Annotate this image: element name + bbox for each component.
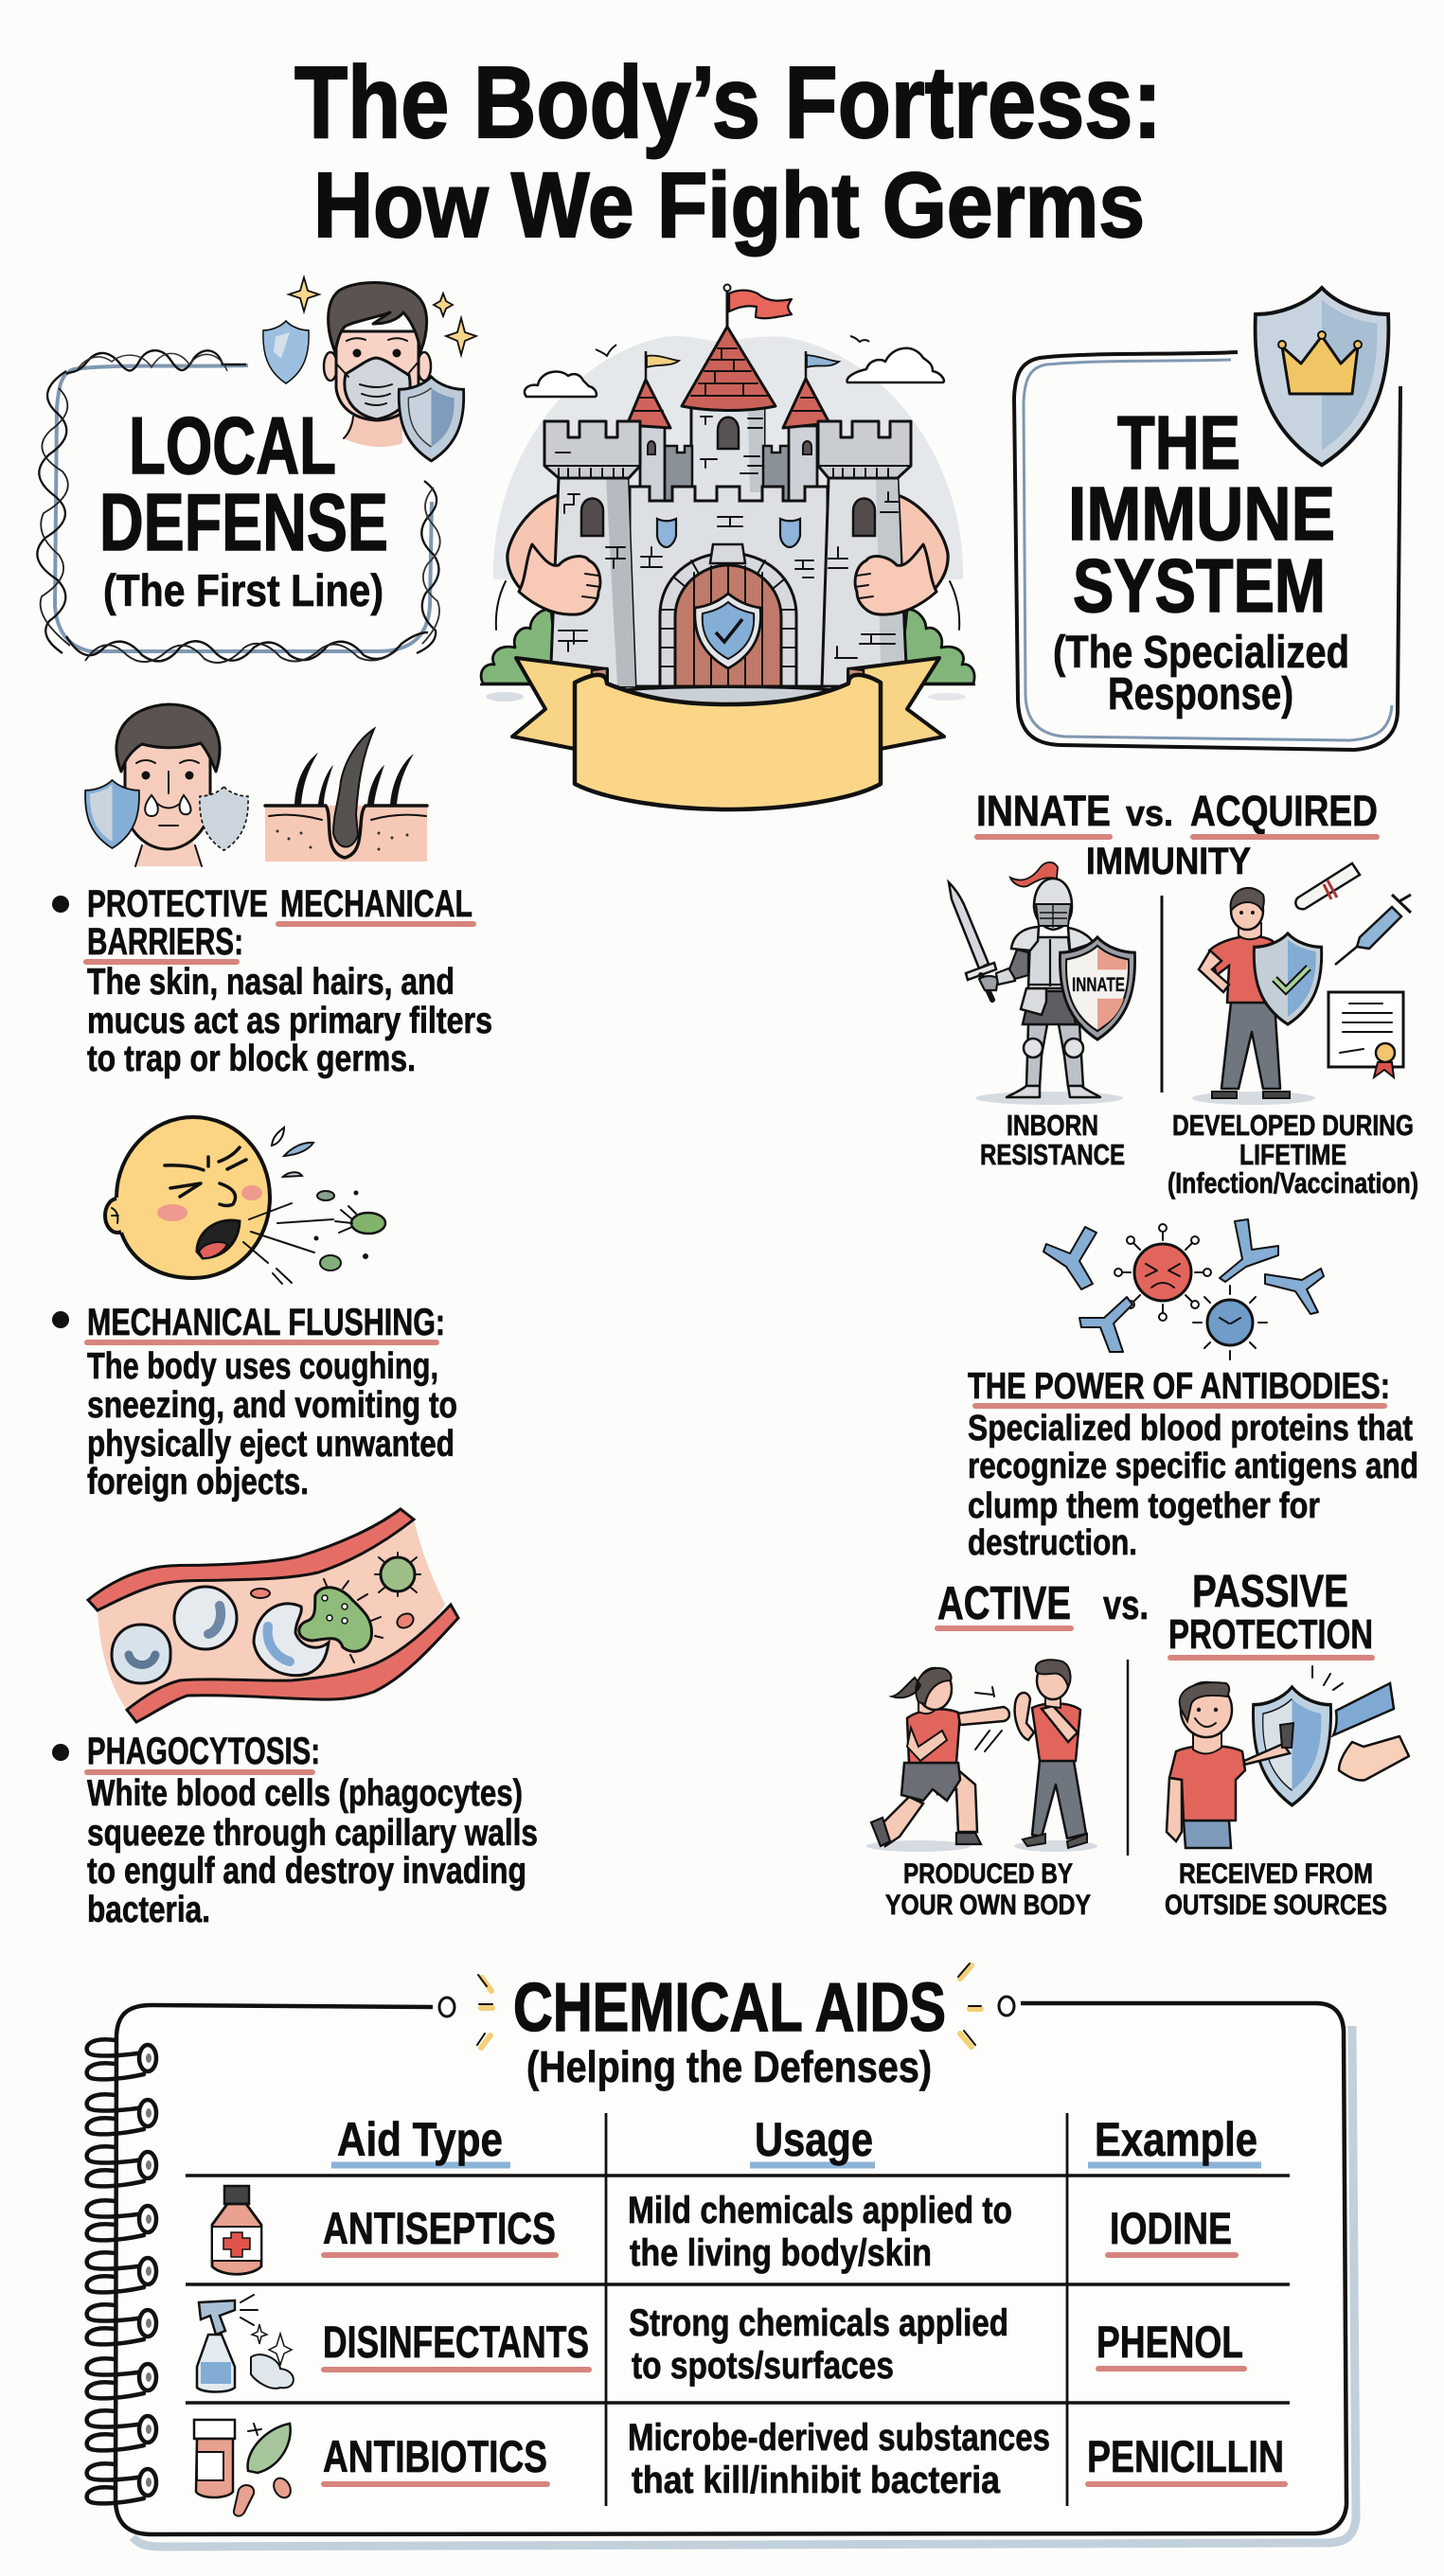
- produced by your own body label: [885, 1858, 1091, 1921]
- icon: sparkles: [289, 277, 476, 355]
- description text: [968, 1409, 1418, 1563]
- title: [294, 44, 1162, 257]
- mail skirt: [1023, 991, 1076, 1024]
- table grid: [186, 2113, 1290, 2506]
- panel: immune system heading: THE: [1117, 400, 1240, 485]
- heading: PASSIVE: [1192, 1567, 1348, 1617]
- heading: IMMUNITY: [1086, 841, 1251, 882]
- fists: [519, 544, 936, 614]
- panel: immune system heading: SYSTEM: [1073, 543, 1326, 628]
- heading: ACTIVE: [937, 1578, 1071, 1629]
- icon: boy with shield and helping hands: [1167, 1666, 1409, 1848]
- inborn resistance label: RESISTANCE: [980, 1138, 1125, 1171]
- bushes: [481, 610, 974, 684]
- scribbled border: [37, 350, 440, 663]
- panel: power of antibodies: [968, 1219, 1418, 1563]
- icon: armored knight: INNATE: [1072, 974, 1125, 996]
- inborn resistance label: INBORN: [1007, 1109, 1098, 1142]
- icon: striped gray shield: [399, 377, 464, 461]
- table row: antibiotics: PENICILLIN: [1087, 2431, 1284, 2481]
- heading text: MECHANICAL FLUSHING:: [87, 1302, 445, 1343]
- description text: White blood cells (phagocytes): [87, 1773, 523, 1814]
- legs: [1026, 1024, 1083, 1087]
- icon: crown shield: [1256, 288, 1388, 465]
- panel: local defense heading: LOCAL: [129, 401, 336, 491]
- description text: [87, 1773, 538, 1930]
- icon: small blue shield: [263, 321, 309, 383]
- panel: chemical aids notebook: [87, 1963, 1356, 2547]
- heading: vs.: [1126, 794, 1173, 834]
- heading: [477, 1963, 981, 2091]
- description text: foreign objects.: [87, 1462, 309, 1502]
- table row: antibiotics: Microbe-derived substances: [628, 2417, 1050, 2459]
- icon: woman boxing: [866, 1668, 1009, 1852]
- center tower with flag: [682, 284, 792, 502]
- description text: to trap or block germs.: [87, 1039, 416, 1079]
- icon: antiseptic bottle: [212, 2186, 261, 2274]
- table row: disinfectants: DISINFECTANTS: [323, 2317, 589, 2367]
- bullet: [52, 1311, 69, 1328]
- main wall: [630, 487, 828, 686]
- icon: man blocking: [1014, 1660, 1097, 1852]
- table row: antiseptics: Mild chemicals applied to: [628, 2190, 1012, 2231]
- spiral binding: [87, 2039, 156, 2503]
- description text: [87, 1346, 457, 1502]
- table row: disinfectants: PHENOL: [1096, 2317, 1243, 2367]
- description text: sneezing, and vomiting to: [87, 1385, 457, 1426]
- panel: immune system heading: Response): [1108, 669, 1293, 720]
- panel: protective mechanical barriers: [52, 704, 492, 1079]
- bullet: [52, 1744, 69, 1761]
- knight shield: [1060, 937, 1135, 1039]
- table row: antibiotics: ANTIBIOTICS: [323, 2431, 547, 2481]
- side turrets and back walls: [627, 351, 839, 502]
- developed during lifetime label: [1168, 1109, 1418, 1199]
- helmet: [1010, 862, 1058, 887]
- description text: [87, 962, 492, 1079]
- heading: (Helping the Defenses): [526, 2042, 932, 2091]
- received from outside sources label: RECEIVED FROM: [1179, 1858, 1373, 1890]
- table row: antiseptics: [212, 2186, 1236, 2274]
- description text: bacteria.: [87, 1890, 210, 1930]
- panel: local defense heading: (The First Line): [103, 565, 383, 615]
- table row: disinfectants: Strong chemicals applied: [629, 2302, 1008, 2344]
- icon: armored knight: [949, 862, 1135, 1105]
- heading text: MECHANICAL: [280, 883, 472, 925]
- heading: INNATE: [976, 787, 1111, 835]
- table row: disinfectants: to spots/surfaces: [632, 2345, 894, 2387]
- description text: The skin, nasal hairs, and: [87, 962, 455, 1003]
- heading text: [86, 883, 473, 963]
- table row: antibiotics: [194, 2417, 1285, 2516]
- panel: local defense heading: DEFENSE: [99, 478, 388, 568]
- background halo: [493, 336, 963, 579]
- description text: destruction.: [968, 1523, 1137, 1563]
- left tower: [544, 421, 640, 686]
- icon: spray bottle: [197, 2295, 294, 2391]
- torso: [1028, 937, 1074, 988]
- description text: clump them together for: [968, 1486, 1320, 1526]
- icon: face with shields: [85, 704, 248, 866]
- heading text: BARRIERS:: [87, 921, 243, 963]
- description text: to engulf and destroy invading: [87, 1851, 526, 1892]
- heading: CHEMICAL AIDS: [513, 1970, 946, 2046]
- heading: ACQUIRED: [1190, 787, 1378, 835]
- panel: active vs passive protection: [866, 1567, 1409, 1921]
- received from outside sources label: OUTSIDE SOURCES: [1165, 1890, 1387, 1921]
- panel: immune system heading: (The Specialized: [1053, 628, 1349, 678]
- heading text: PROTECTIVE: [87, 883, 268, 925]
- right tower: [818, 421, 911, 686]
- panel: phagocytosis: [52, 1509, 538, 1930]
- description text: squeeze through capillary walls: [87, 1813, 538, 1854]
- produced by your own body label: YOUR OWN BODY: [885, 1890, 1091, 1921]
- divider: [1127, 1660, 1129, 1856]
- icon: person with acquired immunity tools: [1192, 863, 1411, 1105]
- description text: physically eject unwanted: [87, 1424, 455, 1465]
- divider: [1161, 896, 1163, 1093]
- developed during lifetime label: LIFETIME: [1239, 1138, 1346, 1171]
- icon: sneezing face: [105, 1117, 385, 1284]
- panel: fortress illustration: [480, 284, 975, 809]
- ribbon banner: [512, 658, 944, 809]
- inborn resistance label: [980, 1109, 1125, 1171]
- table row: antiseptics: ANTISEPTICS: [323, 2203, 556, 2253]
- muscular arms: [508, 494, 948, 615]
- description text: The body uses coughing,: [87, 1346, 438, 1387]
- table header row: [331, 2113, 1261, 2166]
- panel: local defense heading: [37, 350, 440, 663]
- table header row: Usage: [755, 2113, 873, 2166]
- bullet: [52, 896, 69, 913]
- clouds and birds: [525, 336, 944, 397]
- panel: immune system heading: IMMUNE: [1068, 471, 1335, 556]
- heading text: PHAGOCYTOSIS:: [87, 1731, 320, 1772]
- table row: disinfectants: [197, 2295, 1244, 2391]
- gate and door shield: [660, 544, 796, 686]
- heading: vs.: [1103, 1582, 1149, 1628]
- description text: mucus act as primary filters: [87, 1001, 492, 1041]
- table header row: Example: [1095, 2113, 1257, 2166]
- icon: capillary with phagocytes: [88, 1509, 458, 1722]
- heading: [937, 1567, 1373, 1658]
- table row: antiseptics: the living body/skin: [630, 2232, 932, 2274]
- table header row: Aid Type: [337, 2113, 503, 2166]
- icon: skin with hair follicle: [265, 729, 427, 862]
- heading: PROTECTION: [1168, 1611, 1373, 1658]
- motion arcs: [496, 581, 959, 630]
- icon: antibodies and viruses: [1043, 1219, 1324, 1359]
- panel: mechanical flushing: [52, 1117, 457, 1502]
- notebook frame: [116, 1997, 1356, 2547]
- table row: antiseptics: IODINE: [1110, 2203, 1232, 2253]
- received from outside sources label: [1165, 1858, 1387, 1921]
- hand drawn frame: [1014, 352, 1400, 750]
- title: How We Fight Germs: [313, 153, 1145, 257]
- produced by your own body label: PRODUCED BY: [903, 1858, 1073, 1890]
- icon: masked person with shields: [263, 277, 476, 461]
- icon: pill bottle and bacteria: [194, 2420, 294, 2516]
- panel: immune system heading: [1014, 288, 1400, 750]
- title: The Body’s Fortress:: [294, 44, 1162, 159]
- heading: [976, 787, 1378, 882]
- table row: antibiotics: that kill/inhibit bacteria: [632, 2460, 1001, 2501]
- panel: innate vs acquired immunity: [949, 787, 1418, 1199]
